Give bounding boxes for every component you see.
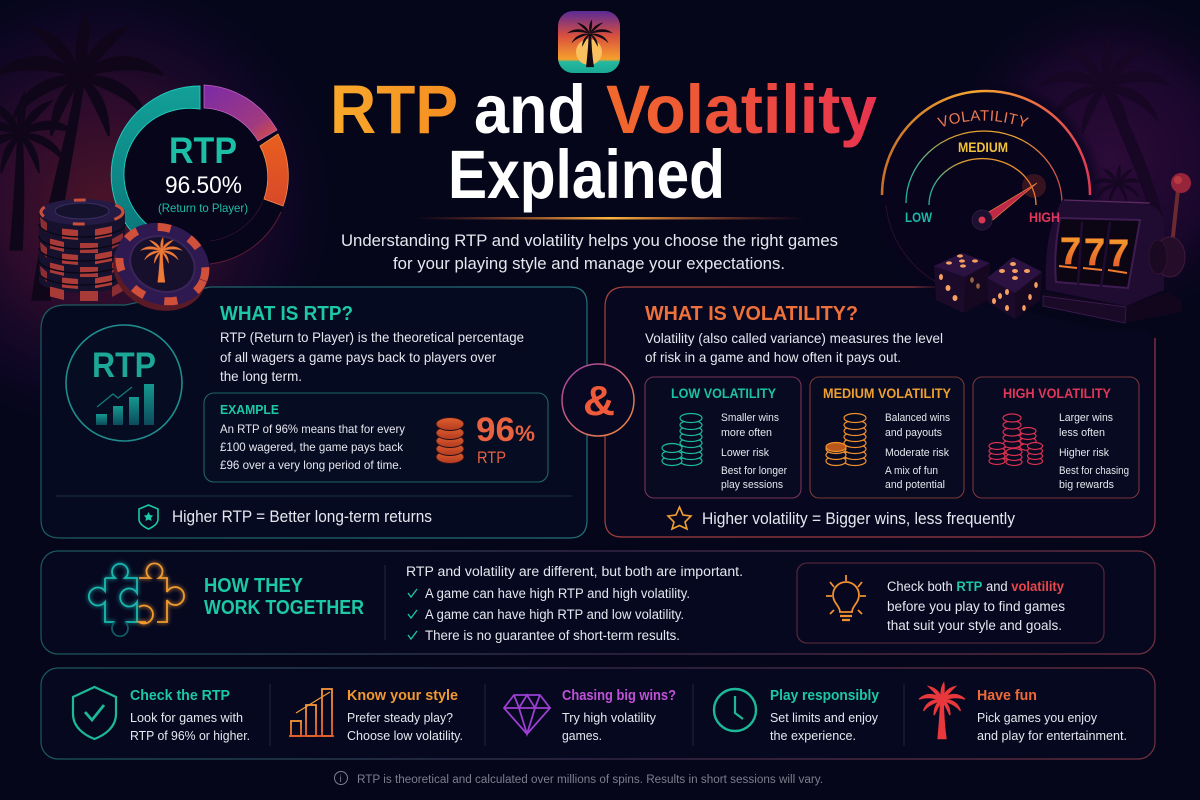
footer disclaimer: i: [340, 774, 342, 785]
slot reels 777: 7: [1084, 232, 1105, 274]
chip with palm: [101, 209, 222, 325]
title: Explained: [448, 136, 725, 213]
example box: An RTP of 96% means that for every: [220, 422, 405, 436]
icon: red coin stacks: [989, 414, 1042, 466]
example box: £96 over a very long period of time.: [220, 458, 402, 472]
tip: check the RTP: [73, 687, 250, 743]
title: [330, 71, 877, 213]
card: low volatility: Smaller wins: [721, 412, 779, 424]
slot reels 777: 7: [1108, 233, 1129, 275]
card: medium volatility: Moderate risk: [885, 447, 949, 459]
tip: know your style: Know your style: [347, 688, 458, 704]
card: medium volatility: and potential: [885, 479, 945, 491]
volatility definition: of risk in a game and how often it pays out.: [645, 349, 901, 365]
title: Volatility: [606, 71, 877, 148]
RTP donut label: 96.50%: [165, 172, 242, 199]
icon: coin stack: [436, 418, 464, 464]
big 96% RTP figure: %: [515, 421, 535, 446]
example box: EXAMPLE: [220, 402, 279, 417]
how they work checklist: [406, 564, 743, 643]
icon: shield badge: [139, 505, 158, 529]
heading: what is RTP: WHAT IS RTP?: [220, 303, 353, 325]
card: high volatility: big rewards: [1059, 479, 1114, 491]
slot lever: [1149, 173, 1191, 277]
RTP definition text: the long term.: [220, 368, 302, 384]
panel: how they work together: [41, 551, 1155, 654]
volatility takeaway: Higher volatility = Bigger wins, less frequently: [702, 509, 1015, 528]
card: high volatility: less often: [1059, 427, 1105, 439]
chip stack: [39, 199, 125, 301]
card: low volatility: Lower risk: [721, 447, 769, 459]
RTP definition text: [220, 329, 524, 384]
volatility definition: Volatility (also called variance) measures the level: [645, 330, 943, 346]
card: low volatility: play sessions: [721, 479, 783, 491]
tip: have fun: and play for entertainment.: [977, 729, 1127, 743]
tip: play responsibly: Play responsibly: [770, 688, 879, 704]
RTP donut label: (Return to Player): [158, 201, 248, 215]
background palms left: [0, 14, 163, 300]
card: medium volatility: and payouts: [885, 427, 942, 439]
RTP circle badge: [66, 325, 182, 441]
tip: have fun: [919, 683, 1127, 743]
title: and: [474, 71, 586, 148]
panel: tips: [41, 668, 1155, 759]
volatility gauge: [880, 90, 1100, 288]
heading: how they work together: HOW THEY: [204, 575, 304, 597]
icon: puzzle pieces: [89, 563, 184, 636]
background palms right: [1040, 38, 1170, 215]
icon: light bulb: [826, 575, 866, 620]
how they work checklist: There is no guarantee of short-term results.: [425, 628, 680, 643]
callout: check both: [797, 563, 1104, 643]
heading: how they work together: WORK TOGETHER: [204, 597, 364, 619]
volatility gauge: VOLATILITY: [937, 110, 1029, 127]
tip: have fun: Have fun: [977, 688, 1037, 704]
example box: £100 wagered, the game pays back: [220, 440, 404, 454]
volatility gauge: LOW: [905, 209, 933, 225]
card: medium volatility: [810, 377, 964, 498]
card: high volatility: HIGH VOLATILITY: [1003, 386, 1111, 401]
card: low volatility: [645, 377, 801, 498]
RTP takeaway: Higher RTP = Better long-term returns: [172, 507, 432, 526]
tip: check the RTP: Look for games with: [130, 711, 243, 725]
volatility gauge: MEDIUM: [958, 140, 1008, 155]
icon: dice: [934, 253, 1042, 319]
big 96% RTP figure: [476, 411, 535, 467]
subtitle: for your playing style and manage your expectations.: [393, 254, 785, 273]
tip: know your style: [289, 688, 463, 743]
RTP donut chart: [111, 85, 289, 264]
example box: [204, 393, 548, 482]
panel: what is RTP: [41, 287, 587, 538]
card: high volatility: Larger wins: [1059, 412, 1113, 424]
card: low volatility: Best for longer: [721, 465, 787, 477]
big 96% RTP figure: 96: [476, 411, 515, 449]
gauge label: high: HIGH: [1029, 209, 1060, 225]
card: medium volatility: Balanced wins: [885, 412, 950, 424]
subtitle: [341, 231, 838, 273]
card: medium volatility: MEDIUM VOLATILITY: [823, 386, 951, 401]
icon: slot machine: [1043, 173, 1191, 323]
slot reels 777: 7: [1060, 231, 1081, 273]
how they work checklist: RTP and volatility are different, but both are important.: [406, 564, 743, 579]
RTP definition text: RTP (Return to Player) is the theoretical percentage: [220, 329, 524, 345]
tip: chasing big wins: games.: [562, 729, 602, 743]
volatility definition: [645, 330, 943, 365]
tip: know your style: Prefer steady play?: [347, 711, 453, 725]
tip: check the RTP: Check the RTP: [130, 688, 230, 704]
ampersand badge: &: [583, 377, 615, 424]
RTP circle badge: RTP: [92, 346, 156, 385]
tip: play responsibly: Set limits and enjoy: [770, 711, 879, 725]
panel: what is volatility: [605, 287, 1155, 537]
tip: chasing big wins: [504, 688, 676, 743]
heading: what is volatility: WHAT IS VOLATILITY?: [645, 303, 858, 325]
card: medium volatility: A mix of fun: [885, 465, 938, 477]
logo: palm at sunset: [558, 11, 620, 73]
tip: play responsibly: [714, 688, 879, 743]
big 96% RTP figure: RTP: [477, 448, 506, 467]
gauge needle: [972, 174, 1046, 230]
subtitle: Understanding RTP and volatility helps you choose the right games: [341, 231, 838, 250]
how they work checklist: A game can have high RTP and high volatility.: [425, 586, 690, 601]
card: low volatility: more often: [721, 427, 772, 439]
footer disclaimer: RTP is theoretical and calculated over millions of spins. Results in short sessions will vary.: [357, 774, 823, 786]
icon: star: [668, 507, 691, 529]
tip: know your style: Choose low volatility.: [347, 729, 463, 743]
callout: check both: that suit your style and goals.: [887, 618, 1062, 633]
heading: how they work together: [204, 575, 364, 619]
callout: check both: before you play to find games: [887, 599, 1065, 614]
tip: play responsibly: the experience.: [770, 729, 856, 743]
title: RTP: [330, 71, 458, 148]
how they work checklist: A game can have high RTP and low volatility.: [425, 607, 684, 622]
ampersand badge: [562, 364, 634, 436]
slot reels 777: [1060, 231, 1129, 275]
RTP donut label: [158, 130, 248, 215]
card: low volatility: LOW VOLATILITY: [671, 386, 776, 401]
RTP donut label: RTP: [169, 130, 237, 171]
RTP definition text: of all wagers a game pays back to players over: [220, 349, 496, 365]
card: high volatility: Best for chasing: [1059, 465, 1129, 477]
card: high volatility: Higher risk: [1059, 447, 1109, 459]
title underline: [415, 217, 805, 220]
card: high volatility: [973, 377, 1139, 498]
tip: check the RTP: RTP of 96% or higher.: [130, 729, 250, 743]
tip: chasing big wins: Chasing big wins?: [562, 688, 676, 704]
tip: chasing big wins: Try high volatility: [562, 711, 657, 725]
icon: orange coin stacks: [826, 414, 866, 466]
icon: teal coin stacks: [662, 414, 702, 466]
tip: have fun: Pick games you enjoy: [977, 711, 1098, 725]
callout: check both: Check both RTP and volatility: [887, 579, 1064, 594]
